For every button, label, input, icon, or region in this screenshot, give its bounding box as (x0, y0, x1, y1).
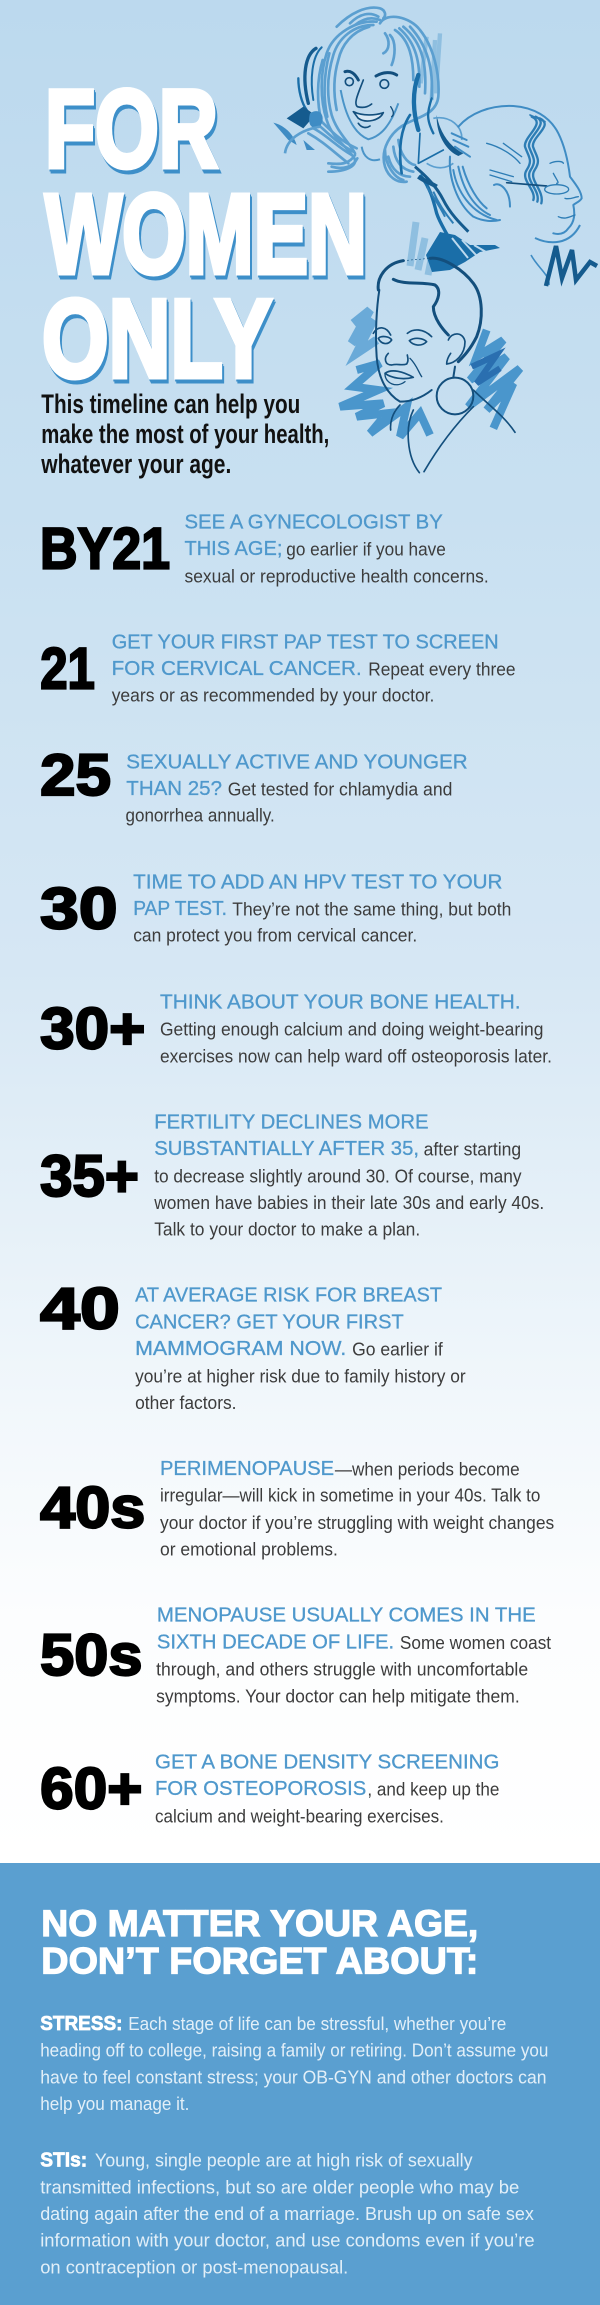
advice: chlamydia and gonorrhea (126, 750, 468, 826)
advice: chlamydia and gonorrhea: THAN 25? (126, 777, 222, 800)
text block: STIs: dating again after the end of a marriage. Brush up on safe sex (40, 2203, 535, 2224)
advice: menopause: symptoms. Your doctor can help mitigate them. (156, 1685, 520, 1706)
advice: mammogram: CANCER? GET YOUR FIRST (135, 1310, 404, 1333)
panel: no matter your age (0, 1863, 600, 2305)
panel heading (41, 1903, 478, 1981)
panel heading: DON’T FORGET ABOUT: (41, 1940, 478, 1981)
illustration: three women (273, 8, 597, 473)
timeline item: 40s (40, 1457, 554, 1560)
title: For Women Only: WOMEN (45, 171, 367, 297)
advice: mammogram (135, 1284, 466, 1413)
advice: pap test (112, 630, 515, 706)
advice: gynecologist: SEE A GYNECOLOGIST BY (184, 510, 443, 533)
text block: STIs: on contraception or post-menopausal. (40, 2256, 348, 2277)
advice: menopause: Some women coast (400, 1632, 551, 1653)
advice: HPV test: can protect you from cervical cancer. (133, 925, 417, 946)
timeline item: 40s: 40s (40, 1476, 145, 1541)
timeline item: 21: 21 (40, 636, 95, 701)
text block: stress (40, 2013, 548, 2114)
advice: perimenopause: irregular—will kick in sometime in your 40s. Talk to (160, 1485, 540, 1506)
subtitle: whatever your age. (41, 449, 231, 479)
advice: pap test: years or as recommended by your doctor. (112, 685, 434, 706)
timeline item: 35+ (40, 1110, 544, 1240)
advice: mammogram: you’re at higher risk due to family history or (135, 1365, 466, 1386)
advice: mammogram: MAMMOGRAM NOW. (135, 1337, 346, 1360)
advice: menopause: SIXTH DECADE OF LIFE. (157, 1630, 394, 1653)
advice: fertility (153, 1110, 544, 1240)
title: For Women Only: ONLY (42, 277, 272, 401)
advice: bone density screening: calcium and weight-bearing exercises. (155, 1805, 444, 1826)
timeline item: 25 (40, 743, 468, 826)
advice: HPV test: They’re not the same thing, but both (232, 898, 511, 920)
text block: stress: heading off to college, raising a family or retiring. Don’t assume you (40, 2040, 548, 2061)
timeline item: 50s: 50s (40, 1623, 142, 1688)
advice: bone health: Getting enough calcium and doing weight-bearing (160, 1019, 543, 1040)
timeline item: 30+: 30+ (40, 996, 145, 1061)
subtitle (41, 389, 329, 479)
advice: pap test: Repeat every three (368, 658, 516, 680)
advice: bone health: THINK ABOUT YOUR BONE HEALTH. (160, 990, 520, 1013)
text block: stress: have to feel constant stress; your OB-GYN and other doctors can (40, 2066, 546, 2087)
advice: bone density screening: GET A BONE DENSITY SCREENING (155, 1750, 499, 1773)
hair and collar details between portraits (410, 222, 597, 286)
advice: perimenopause: —when periods become (335, 1458, 520, 1480)
timeline item: 35+: 35+ (40, 1144, 139, 1209)
advice: chlamydia and gonorrhea: SEXUALLY ACTIVE AND YOUNGER (126, 750, 468, 773)
text block: STIs (40, 2150, 535, 2277)
advice: chlamydia and gonorrhea: gonorrhea annually. (126, 805, 275, 826)
portrait: young woman and older woman in profile (273, 8, 582, 240)
advice: bone density screening: , and keep up the (367, 1778, 499, 1800)
advice: gynecologist: THIS AGE; (184, 537, 282, 560)
timeline item: 40 (40, 1276, 466, 1413)
advice: gynecologist: go earlier if you have (286, 538, 446, 560)
advice: gynecologist (184, 510, 489, 586)
text block: stress: STRESS: (40, 2013, 123, 2035)
advice: fertility: to decrease slightly around 30. Of course, many (154, 1165, 522, 1186)
timeline item: 60+ (40, 1750, 499, 1826)
advice: bone density screening: FOR OSTEOPOROSIS (155, 1777, 366, 1800)
advice: fertility: FERTILITY DECLINES MORE (154, 1110, 429, 1133)
advice: fertility: SUBSTANTIALLY AFTER 35, (154, 1137, 419, 1160)
text block: STIs: information with your doctor, and use condoms even if you’re (40, 2230, 535, 2251)
advice: pap test: GET YOUR FIRST PAP TEST TO SCREEN (112, 630, 499, 653)
advice: gynecologist: sexual or reproductive health concerns. (184, 565, 489, 586)
advice: menopause: through, and others struggle with uncomfortable (156, 1659, 528, 1680)
timeline item: 60+: 60+ (40, 1756, 142, 1821)
advice: mammogram: Go earlier if (352, 1338, 444, 1360)
text block: STIs: STIs: (40, 2150, 87, 2172)
timeline item: 30+ (40, 990, 552, 1066)
advice: fertility: women have babies in their late 30s and early 40s. (153, 1192, 544, 1213)
timeline item: by 21 (40, 510, 489, 586)
timeline item: 30: 30 (40, 876, 118, 941)
advice: HPV test (133, 870, 511, 946)
timeline item: 40: 40 (40, 1276, 120, 1341)
advice: perimenopause: your doctor if you’re struggling with weight changes (160, 1512, 554, 1533)
advice: bone health: exercises now can help ward off osteoporosis later. (160, 1045, 552, 1066)
advice: mammogram: other factors. (135, 1392, 236, 1413)
subtitle: This timeline can help you (41, 389, 300, 419)
advice: perimenopause: PERIMENOPAUSE (160, 1457, 334, 1480)
advice: perimenopause: or emotional problems. (160, 1539, 338, 1560)
advice: fertility: Talk to your doctor to make a plan. (154, 1219, 420, 1240)
timeline item: by 21: BY21 (40, 516, 170, 581)
title: For Women Only: FOR (45, 68, 218, 191)
advice: chlamydia and gonorrhea: Get tested for chlamydia and (228, 778, 452, 800)
text block: STIs: Young, single people are at high risk of sexually (95, 2150, 473, 2171)
text block: stress: Each stage of life can be stressful, whether you’re (128, 2013, 506, 2034)
advice: HPV test: TIME TO ADD AN HPV TEST TO YOUR (133, 870, 502, 893)
advice: perimenopause (160, 1457, 554, 1560)
text block: stress: help you manage it. (40, 2093, 189, 2114)
timeline item: 21 (40, 630, 515, 706)
advice: menopause: MENOPAUSE USUALLY COMES IN THE (157, 1604, 536, 1627)
advice: pap test: FOR CERVICAL CANCER. (112, 657, 362, 680)
title: For Women Only (42, 68, 367, 401)
portrait: woman with short curly hair and hoop earring (340, 258, 520, 473)
advice: bone density screening (155, 1750, 499, 1826)
timeline item: 30 (40, 870, 511, 946)
advice: mammogram: AT AVERAGE RISK FOR BREAST (135, 1284, 442, 1307)
timeline item: 25: 25 (40, 743, 111, 808)
advice: HPV test: PAP TEST. (133, 897, 227, 920)
text block: STIs: transmitted infections, but so are older people who may be (40, 2176, 519, 2197)
timeline item: 50s (40, 1604, 551, 1706)
subtitle: make the most of your health, (41, 419, 329, 449)
advice: menopause (156, 1604, 551, 1706)
panel heading: NO MATTER YOUR AGE, (41, 1903, 478, 1944)
advice: fertility: after starting (424, 1138, 521, 1160)
advice: bone health (160, 990, 552, 1066)
